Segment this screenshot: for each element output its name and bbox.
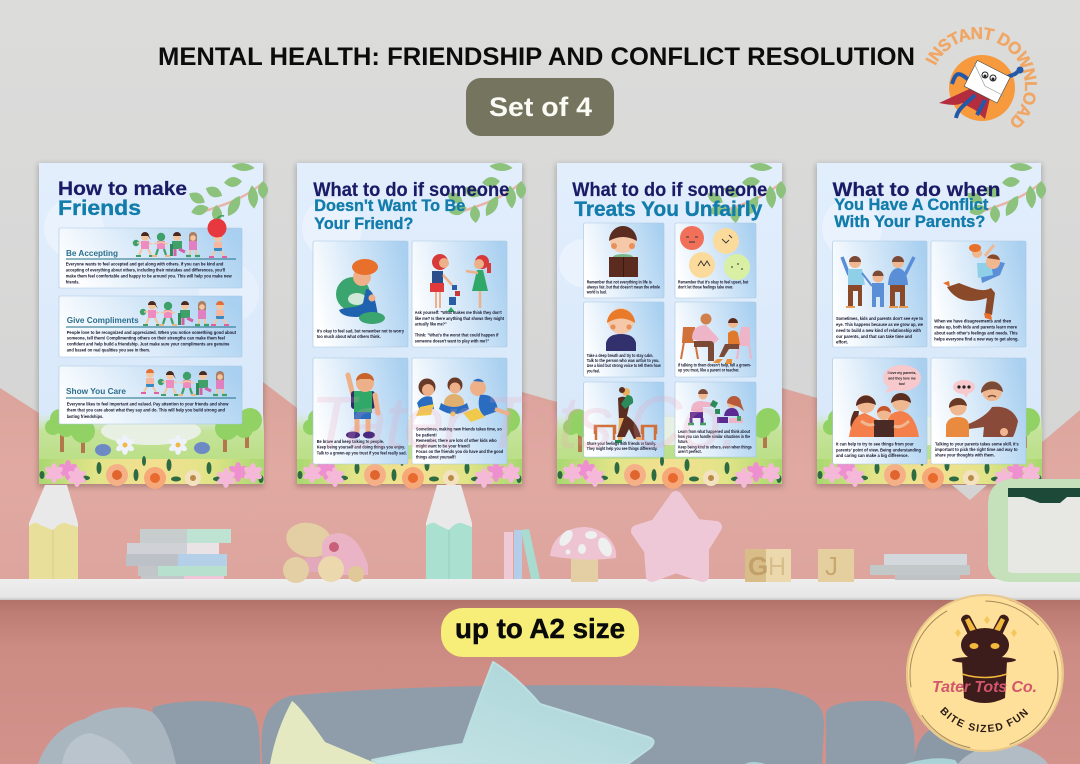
panel: show you care: Show You Care	[66, 386, 126, 396]
title: Doesn't Want To Be	[314, 197, 465, 215]
panel: show you care: lasting friendships.	[67, 414, 103, 419]
badge: set of 4: Set of 4	[489, 92, 592, 122]
yellow star pillow	[270, 701, 378, 764]
blue star pillow	[372, 662, 654, 764]
panel: give compliments: People love to be recognized and appreciated. When you notice something good about	[67, 330, 237, 335]
panel: don't see eye to eye: Sometimes, kids and parents don't see eye to	[836, 316, 923, 321]
poster 1: how to make friends	[39, 162, 268, 489]
panel: feel sad: too much about what others think.	[317, 334, 381, 339]
panel: parents' point of view: and caring can make a big difference.	[836, 453, 909, 458]
panel: ask yourself	[412, 241, 507, 347]
title: Your Friend?	[314, 215, 413, 233]
panel: share feelings: They might help you see things differently.	[587, 446, 657, 451]
poster shadows	[38, 164, 1042, 487]
panel: be accepting	[59, 216, 242, 288]
panel: disagreements and making up	[931, 241, 1026, 347]
icon: boy reading book	[609, 226, 638, 277]
icon: emotion circles	[680, 226, 750, 280]
panel: don't see eye to eye	[833, 241, 927, 347]
yellow pencil	[29, 485, 78, 579]
panel: deep breath: Take a deep breath and try to stay calm.	[587, 353, 653, 358]
panel: life is not always fair: world is bad.	[586, 290, 607, 295]
panel: don't see eye to eye: eye. This happens because as we grow up, we	[836, 322, 924, 327]
panel: don't see eye to eye: our parents, and that can take time and	[836, 334, 912, 339]
pill: up to A2 size	[441, 608, 639, 657]
panel: ask yourself: Think: "What's the worst that could happen if	[415, 333, 499, 338]
icon: family of three	[842, 256, 914, 307]
letter blocks: G	[748, 551, 768, 581]
panel: be brave	[313, 358, 408, 464]
icon: family hugging	[849, 393, 919, 437]
panel: share feelings	[584, 382, 664, 457]
panel: learn from what happened: Keep being kind to others, even when things	[678, 444, 752, 449]
mushroom toy	[550, 527, 616, 582]
panel: making new friends: Sometimes, making new friends takes time, so	[416, 426, 502, 431]
panel: talking to your parents: Talking to your parents takes some skill. It's	[935, 441, 1019, 446]
badge: instant download: INSTANT DOWNLOAD	[925, 27, 1037, 128]
panel: deep breath: Talk to the person who was unfair to you.	[587, 358, 659, 363]
panel: be accepting: Everyone wants to feel accepted and get along with others. If you can be kind and	[66, 261, 224, 266]
speech bubble	[883, 365, 921, 393]
mint pencil	[426, 485, 472, 579]
panel: disagreements and making up: about each other's feelings and needs. This	[934, 331, 1018, 336]
panel: ask yourself: like me? Is there anything that shows they might	[415, 316, 505, 321]
flat books	[870, 554, 970, 580]
upright books	[504, 529, 540, 579]
letter blocks: H	[768, 553, 786, 581]
panel: learn from what happened	[675, 382, 756, 457]
panel: making new friends: Focus on the friends you do have and the good	[416, 449, 504, 454]
green storage box	[988, 479, 1080, 582]
icon: seated people talking	[681, 314, 751, 364]
watermark: Tater Tots Co.	[310, 381, 740, 464]
panel: disagreements and making up: When we have disagreements and then	[934, 318, 1012, 323]
sofa	[38, 685, 1048, 764]
poster 3: someone treats you unfairly	[557, 162, 786, 489]
letter blocks	[745, 549, 854, 582]
panel: parents' point of view: parents' point of view. Being understanding	[836, 447, 921, 452]
panel: parents' point of view: It can help to try to see things from your	[836, 441, 914, 446]
shelf	[0, 579, 1080, 600]
panel: give compliments: confident and help build a friendship. Just make sure your compliments are genuine	[67, 342, 230, 347]
panel: parents' point of view	[833, 358, 927, 464]
panel: be accepting: Be Accepting	[66, 248, 118, 258]
panel: talking to your parents: share your thoughts with them.	[935, 453, 995, 458]
title: With Your Parents?	[834, 213, 985, 231]
panel: learn from what happened: aren't perfect.	[678, 449, 702, 454]
panel: learn from what happened: Learn from what happened and think about	[678, 429, 750, 434]
badge: set of 4	[466, 78, 614, 136]
heading: main title: MENTAL HEALTH: FRIENDSHIP AND CONFLICT RESOLUTION	[158, 43, 915, 71]
panel: making new friends: might want to be your friend!	[416, 443, 470, 448]
panel: give compliments	[59, 296, 242, 357]
panel: give compliments: someone, tell them! Complimenting others on their strengths can make them feel	[67, 336, 225, 341]
letter blocks: J	[825, 551, 838, 581]
panel: be brave: Be brave and keep talking to people.	[317, 439, 384, 444]
small triangle below poster 4	[952, 485, 987, 500]
title	[832, 179, 1000, 231]
panel: okay to feel upset: Remember that it's okay to feel upset, but	[678, 279, 749, 284]
title: Friends	[58, 197, 141, 220]
icon: waving boy with backpack	[346, 373, 378, 438]
panel: okay to feel upset	[675, 223, 756, 298]
panel: be brave: Keep being yourself and doing things you enjoy.	[317, 445, 405, 450]
poster 2: someone doesn't want to be your friend	[297, 162, 526, 489]
title	[313, 180, 509, 233]
panel: tell a grown-up: If talking to them doesn't help, tell a grown-	[678, 362, 752, 367]
stacked books	[126, 529, 231, 579]
speech bubble: I love my parents,	[888, 371, 916, 375]
panel: show you care: them that you care about what they say and do. This will help you build strong and	[67, 408, 225, 413]
icon: parent carrying child	[943, 244, 1005, 320]
speech bubble: and they love me	[888, 376, 916, 380]
star toy	[637, 497, 716, 576]
logo: Tater Tots Co.	[906, 594, 1064, 752]
icon: parent and child talking	[946, 381, 1018, 437]
icon: calm boy	[606, 308, 636, 351]
panel: talking to your parents: important to pick the right time and way to	[935, 447, 1018, 452]
panel: feel sad: It's okay to feel sad, but remember not to worry	[317, 328, 405, 333]
panel: making new friends: Remember, there are lots of other kids who	[416, 438, 497, 443]
panel: deep breath: you feel.	[587, 368, 600, 373]
panel: learn from what happened: future.	[678, 439, 688, 444]
panel: making new friends	[412, 358, 509, 464]
panel: tell a grown-up: up you trust, like a parent or teacher.	[678, 368, 739, 373]
panel: show you care: Everyone likes to feel important and valued. Pay attention to your friends and show	[67, 402, 229, 407]
panel: deep breath: Use a kind but strong voice to tell them how	[587, 363, 661, 368]
logo: Tater Tots Co.: Tater Tots Co.	[932, 679, 1037, 696]
panel: ask yourself: actually like me?"	[415, 322, 447, 327]
panel: okay to feel upset: don't let those feelings take over.	[678, 285, 733, 290]
panel: give compliments: Give Compliments	[67, 315, 139, 325]
title: You Have A Conflict	[834, 196, 989, 214]
icon: three kids reading	[416, 378, 509, 422]
icon: speech bubble with dots	[953, 380, 975, 398]
title: Treats You Unfairly	[574, 198, 763, 221]
panel: give compliments: and based on real qualities you see in them.	[67, 348, 150, 353]
panel: ask yourself: Ask yourself: "What makes me think they don't	[415, 310, 502, 315]
panel: ask yourself: someone doesn't want to play with me?"	[415, 338, 489, 343]
icon: two friends hugging	[595, 387, 656, 443]
panel: making new friends: things about yourself!	[416, 455, 456, 460]
panel: learn from what happened: how you can handle similar situations in the	[678, 434, 751, 439]
panel: show you care	[59, 366, 242, 424]
title: How to make	[58, 178, 187, 200]
panel: share feelings: Share your feelings with friends or family.	[587, 441, 656, 446]
title: What to do if someone	[313, 180, 509, 201]
panel: life is not always fair: Remember that not everything in life is	[587, 280, 652, 285]
panel: don't see eye to eye: effort.	[836, 340, 848, 345]
panel: deep breath	[584, 302, 664, 377]
panel: life is not always fair	[584, 223, 664, 298]
panel: life is not always fair: always fair, but that doesn't mean the whole	[587, 285, 661, 290]
pill: up to A2 size: up to A2 size	[455, 613, 625, 644]
icon: kids playing with blocks	[688, 389, 744, 424]
pink wall shape	[0, 340, 1080, 600]
lower pink wall	[0, 599, 1080, 764]
panel: don't see eye to eye: need to build a new kind of relationship with	[836, 328, 921, 333]
logo: Tater Tots Co.: BITE SIZED FUN	[940, 706, 1028, 732]
toy car	[283, 519, 368, 583]
title: What to do when	[832, 179, 1000, 201]
icon: two girls with blocks	[430, 254, 491, 312]
panel: disagreements and making up: make up, both kids and parents learn more	[934, 325, 1018, 330]
panel: be brave: Talk to a grown-up you trust if you feel really sad.	[317, 450, 407, 455]
panel: feel sad	[313, 241, 408, 347]
poster 4: conflict with your parents	[817, 162, 1046, 489]
title	[58, 178, 187, 220]
panel: tell a grown-up	[675, 302, 756, 377]
panel: be accepting: friends.	[66, 279, 79, 284]
panel: making new friends: be patient!	[416, 432, 437, 437]
panel: be accepting: make them feel comfortable and happy to be around you. This will help you make new	[66, 273, 232, 278]
icon: sad boy	[336, 259, 385, 324]
panel: talking to your parents	[931, 358, 1026, 464]
speech bubble: too!	[899, 382, 905, 386]
panel: be accepting: accepting of everything about others, including their mistakes and differences, you'll	[66, 267, 225, 272]
panel: disagreements and making up: helps everyone find a new way to get along.	[934, 336, 1019, 341]
title	[572, 180, 767, 221]
title: What to do if someone	[572, 180, 767, 201]
